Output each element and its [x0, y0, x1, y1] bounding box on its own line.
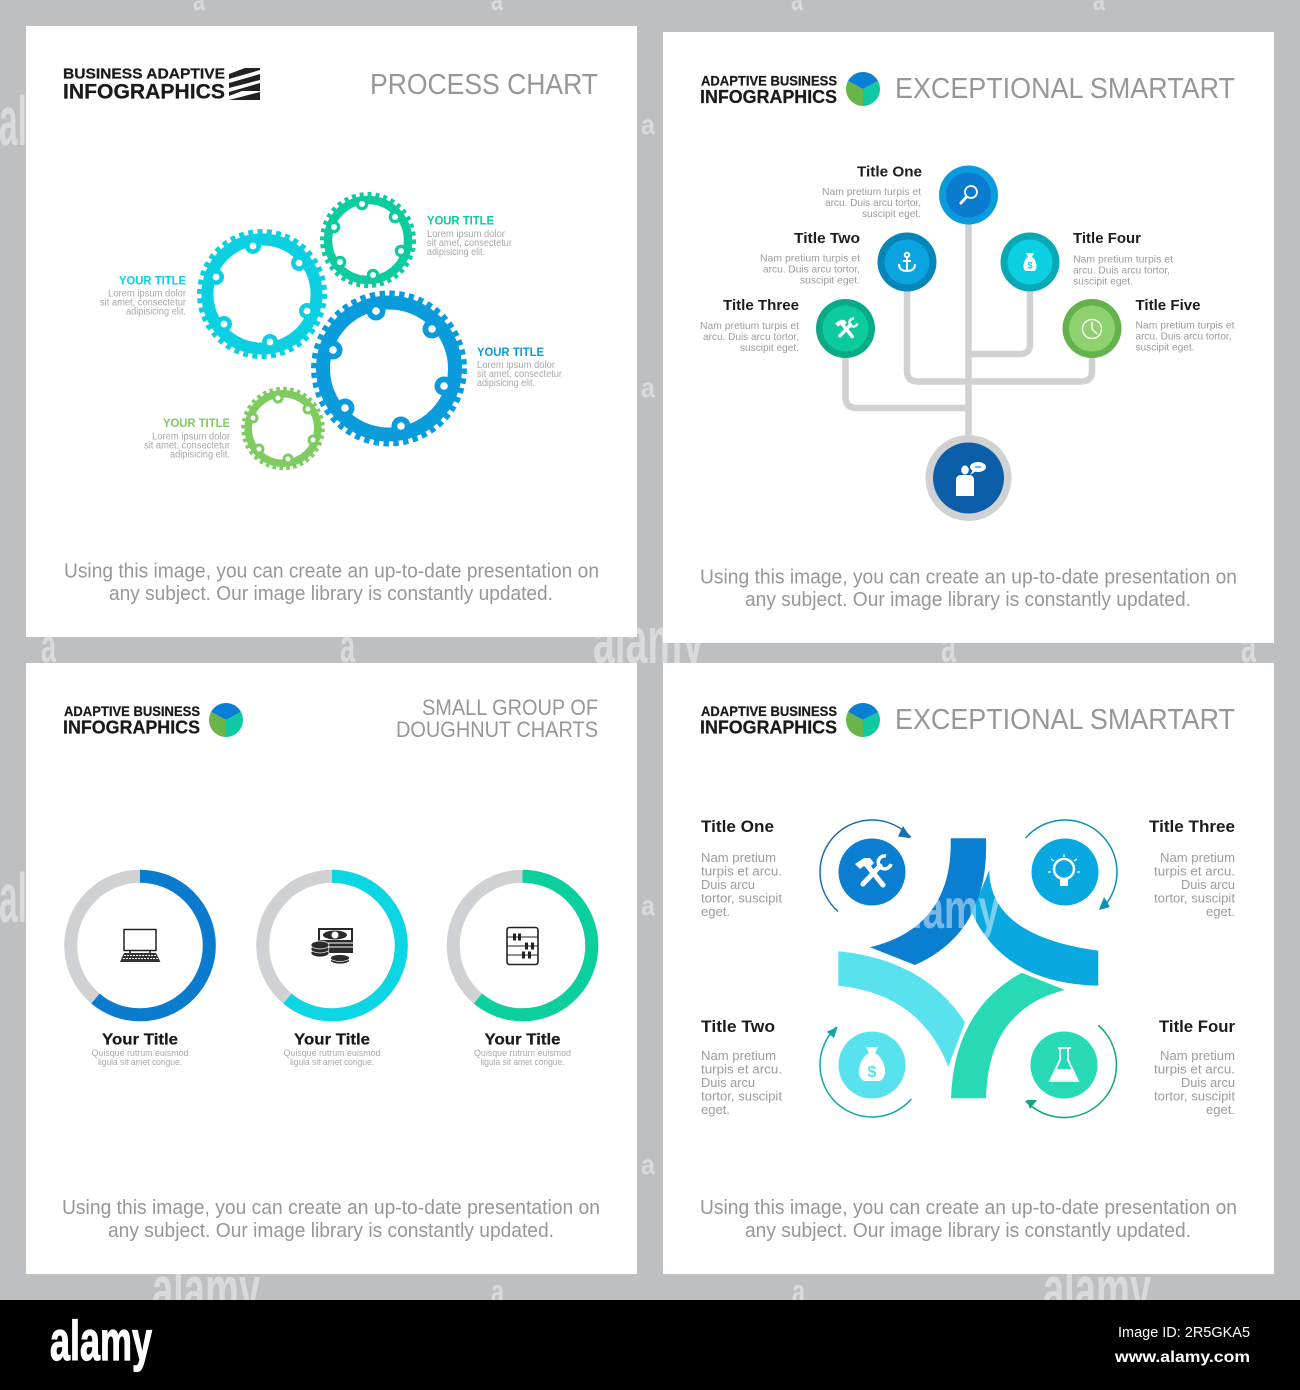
label: title three: Nam pretium: [1160, 850, 1235, 865]
label: title one: Title One: [701, 817, 774, 836]
label: title four: eget.: [1206, 1102, 1235, 1117]
node: title three: Title Three: [723, 297, 799, 314]
watermarks in background gaps: al: [0, 859, 27, 937]
node: title five: suscipit eget.: [1136, 342, 1194, 354]
label: green your title: sit amet, consectetur: [144, 440, 231, 452]
heading: process chart: PROCESS CHART: [370, 69, 598, 101]
doughnut: green: [453, 876, 592, 1068]
node: title two: arcu. Duis arcu tortor,: [763, 264, 860, 276]
watermarks in background gaps: a: [641, 109, 655, 140]
label: title three: [1149, 817, 1235, 919]
node: title one: suscipit eget.: [862, 208, 921, 220]
arc segments: [838, 838, 1098, 1098]
body text: [700, 566, 1237, 611]
doughnut: blue: Quisque rutrum euismod: [92, 1048, 188, 1059]
heading: small group of doughnut charts: SMALL GROUP OF: [422, 695, 598, 720]
logo: business adaptive infographics: INFOGRAPHICS: [63, 80, 225, 104]
body text: Using this image, you can create an up-to-date presentation on: [62, 1197, 600, 1219]
doughnut: cyan: [263, 876, 401, 1068]
body text: Using this image, you can create an up-to-date presentation on: [700, 1197, 1237, 1219]
heading: small group of doughnut charts: DOUGHNUT CHARTS: [396, 717, 598, 742]
heading: small group of doughnut charts: [396, 695, 598, 742]
node: title one: Title One: [857, 164, 922, 180]
label: title one: tortor, suscipit: [701, 890, 782, 906]
label: title two: tortor, suscipit: [701, 1088, 782, 1104]
label: teal your title: adipisicing elit.: [427, 247, 485, 258]
label: title two: [701, 1017, 782, 1117]
label: title two: Nam pretium: [701, 1048, 776, 1063]
logo: adaptive business infographics: ADAPTIVE BUSINESS: [701, 72, 837, 88]
body text: any subject. Our image library is constantly updated.: [109, 583, 553, 605]
logo: adaptive business infographics: INFOGRAPHICS: [700, 718, 837, 738]
icon group: flask: [990, 991, 1138, 1139]
label: title four: [1154, 1017, 1235, 1117]
watermarks in background gaps: alamy: [152, 1252, 260, 1326]
label: cyan your title: sit amet, consectetur: [100, 298, 187, 308]
node: title five: [1062, 297, 1235, 358]
node: title two: suscipit eget.: [800, 274, 860, 286]
body text: [64, 560, 599, 605]
node: title five: arcu. Duis arcu tortor,: [1136, 330, 1232, 342]
watermarks in background gaps: a: [491, 1271, 505, 1312]
node: central person: [926, 435, 1012, 521]
node: title four: [1000, 230, 1173, 292]
watermarks in background gaps: a: [1241, 619, 1256, 672]
body text: any subject. Our image library is constantly updated.: [745, 1220, 1191, 1242]
panel: exceptional smartart cycle: [663, 663, 1274, 1274]
footer logo: alamy: alamy: [50, 1309, 152, 1372]
logo: adaptive business infographics: ADAPTIVE BUSINESS: [701, 703, 837, 719]
label: title one: Duis arcu: [701, 877, 755, 892]
doughnut: blue: Your Title: [102, 1032, 178, 1048]
node: title three: Nam pretium turpis et: [700, 320, 799, 332]
node: title four: suscipit eget.: [1073, 276, 1133, 288]
label: blue your title: Lorem ipsum dolor: [477, 360, 556, 371]
heading: exceptional smartart: EXCEPTIONAL SMARTART: [895, 704, 1235, 736]
body text: any subject. Our image library is constantly updated.: [745, 589, 1191, 611]
node: title three: [700, 297, 875, 358]
body text: Using this image, you can create an up-to-date presentation on: [64, 560, 599, 582]
label: cyan your title: YOUR TITLE: [119, 274, 186, 288]
doughnut: cyan: Quisque rutrum euismod: [284, 1048, 380, 1059]
logo: business adaptive infographics: BUSINESS ADAPTIVE: [63, 66, 225, 82]
label: teal your title: YOUR TITLE: [427, 214, 494, 228]
node: title one: arcu. Duis arcu tortor,: [825, 197, 921, 209]
label: cyan your title: Lorem ipsum dolor: [108, 288, 187, 300]
label: title one: eget.: [701, 904, 730, 919]
icon group: light bulb: [992, 799, 1138, 945]
gear: cyan: [200, 232, 324, 356]
body text: [62, 1197, 600, 1242]
label: title two: eget.: [701, 1102, 730, 1117]
icon group: money bag: $: [868, 1064, 877, 1081]
label: title one: Nam pretium: [701, 850, 776, 865]
logo: adaptive business infographics: INFOGRAPHICS: [700, 87, 837, 107]
node: title four: Title Four: [1073, 230, 1141, 247]
node: title two: Title Two: [794, 230, 860, 247]
label: title one: turpis et arcu.: [701, 864, 782, 878]
label: green your title: [144, 416, 231, 460]
doughnut: cyan: Your Title: [294, 1032, 370, 1048]
node: title two: Nam pretium turpis et: [760, 252, 860, 264]
label: title three: turpis et arcu.: [1154, 864, 1235, 878]
label: title three: Title Three: [1149, 817, 1235, 836]
label: blue your title: YOUR TITLE: [477, 345, 544, 359]
label: title four: tortor, suscipit: [1154, 1088, 1235, 1104]
label: teal your title: sit amet, consectetur: [427, 238, 513, 249]
panel: process chart: [26, 26, 637, 637]
watermarks in background gaps: al: [0, 82, 27, 160]
doughnut: blue: [71, 876, 209, 1068]
watermarks in background gaps: alamy: [593, 603, 704, 677]
footer bar: [0, 1300, 1300, 1390]
icon group: tools: [799, 799, 945, 945]
label: cyan your title: [100, 274, 187, 318]
faint overlay watermark: alamy: [890, 877, 1000, 940]
label: title four: Title Four: [1159, 1017, 1235, 1036]
label: title two: Duis arcu: [701, 1075, 755, 1090]
watermarks in background gaps: a: [641, 1149, 655, 1180]
label: title four: Nam pretium: [1160, 1048, 1235, 1063]
watermarks in background gaps: a: [641, 890, 655, 921]
node: title five: Title Five: [1136, 297, 1200, 314]
label: title two: Title Two: [701, 1017, 775, 1036]
icon: laptop: [120, 930, 160, 962]
footer image id: Image ID: 2R5GKA5: [1118, 1324, 1250, 1341]
label: title three: eget.: [1206, 904, 1235, 919]
label: green your title: Lorem ipsum dolor: [152, 432, 231, 442]
doughnut: green: ligula sit amet congue.: [480, 1057, 564, 1068]
doughnut: green: Quisque rutrum euismod: [474, 1048, 571, 1059]
logo: business adaptive infographics: [63, 66, 260, 104]
node: title four: arcu. Duis arcu tortor,: [1073, 264, 1170, 276]
label: blue your title: sit amet, consectetur: [477, 369, 563, 380]
label: green your title: YOUR TITLE: [163, 416, 230, 430]
gear: blue: [314, 293, 464, 444]
icon: cash and coins: [311, 928, 353, 964]
body text: Using this image, you can create an up-to-date presentation on: [700, 566, 1237, 588]
label: title one: [701, 817, 782, 919]
label: title three: Duis arcu: [1181, 877, 1235, 892]
panel: small group of doughnut charts: [26, 663, 637, 1274]
watermarks in background gaps: a: [641, 372, 655, 403]
node: title five: Nam pretium turpis et: [1136, 320, 1235, 332]
label: blue your title: adipisicing elit.: [477, 378, 535, 389]
doughnut: cyan: ligula sit amet congue.: [290, 1057, 374, 1068]
gear: green: [243, 388, 323, 468]
node: title one: [822, 164, 998, 224]
doughnut: green: Your Title: [484, 1032, 561, 1048]
label: title two: turpis et arcu.: [701, 1062, 782, 1076]
connector lines: [846, 220, 1092, 445]
logo: adaptive business infographics: [700, 703, 880, 738]
watermarks in background gaps: alamy: [1043, 1252, 1151, 1326]
watermarks in background gaps: a: [792, 1271, 806, 1312]
node: title four: Nam pretium turpis et: [1073, 254, 1173, 266]
gear: teal: [322, 194, 414, 286]
label: teal your title: Lorem ipsum dolor: [427, 229, 506, 240]
node: title three: suscipit eget.: [740, 342, 799, 354]
watermarks in background gaps: a: [340, 619, 355, 672]
label: title four: Duis arcu: [1181, 1075, 1235, 1090]
icon group: money bag: [799, 992, 945, 1138]
icon: abacus: [507, 928, 538, 964]
body text: any subject. Our image library is constantly updated.: [108, 1220, 554, 1242]
node: title one: Nam pretium turpis et: [822, 186, 921, 198]
label: green your title: adipisicing elit.: [170, 450, 230, 460]
body text: [700, 1197, 1237, 1242]
doughnut: blue: ligula sit amet congue.: [98, 1057, 182, 1068]
logo: adaptive business infographics: ADAPTIVE BUSINESS: [64, 703, 200, 719]
panel: exceptional smartart tree: [663, 32, 1274, 643]
heading: exceptional smartart: EXCEPTIONAL SMARTART: [895, 73, 1235, 105]
label: title three: tortor, suscipit: [1154, 890, 1235, 906]
label: title four: turpis et arcu.: [1154, 1062, 1235, 1076]
node: title four: $: [1027, 260, 1033, 270]
logo: adaptive business infographics: [700, 72, 880, 107]
label: blue your title: [477, 345, 563, 389]
node: title three: arcu. Duis arcu tortor,: [703, 331, 799, 343]
watermarks in background gaps: a: [941, 619, 956, 672]
logo: adaptive business infographics: INFOGRAPHICS: [63, 718, 200, 738]
label: teal your title: [427, 214, 513, 258]
watermarks in background gaps: a: [41, 619, 56, 672]
footer url: www.alamy.com: [1114, 1349, 1250, 1366]
node: title two: [760, 230, 936, 292]
label: cyan your title: adipisicing elit.: [126, 306, 186, 318]
logo: adaptive business infographics: [63, 703, 243, 738]
